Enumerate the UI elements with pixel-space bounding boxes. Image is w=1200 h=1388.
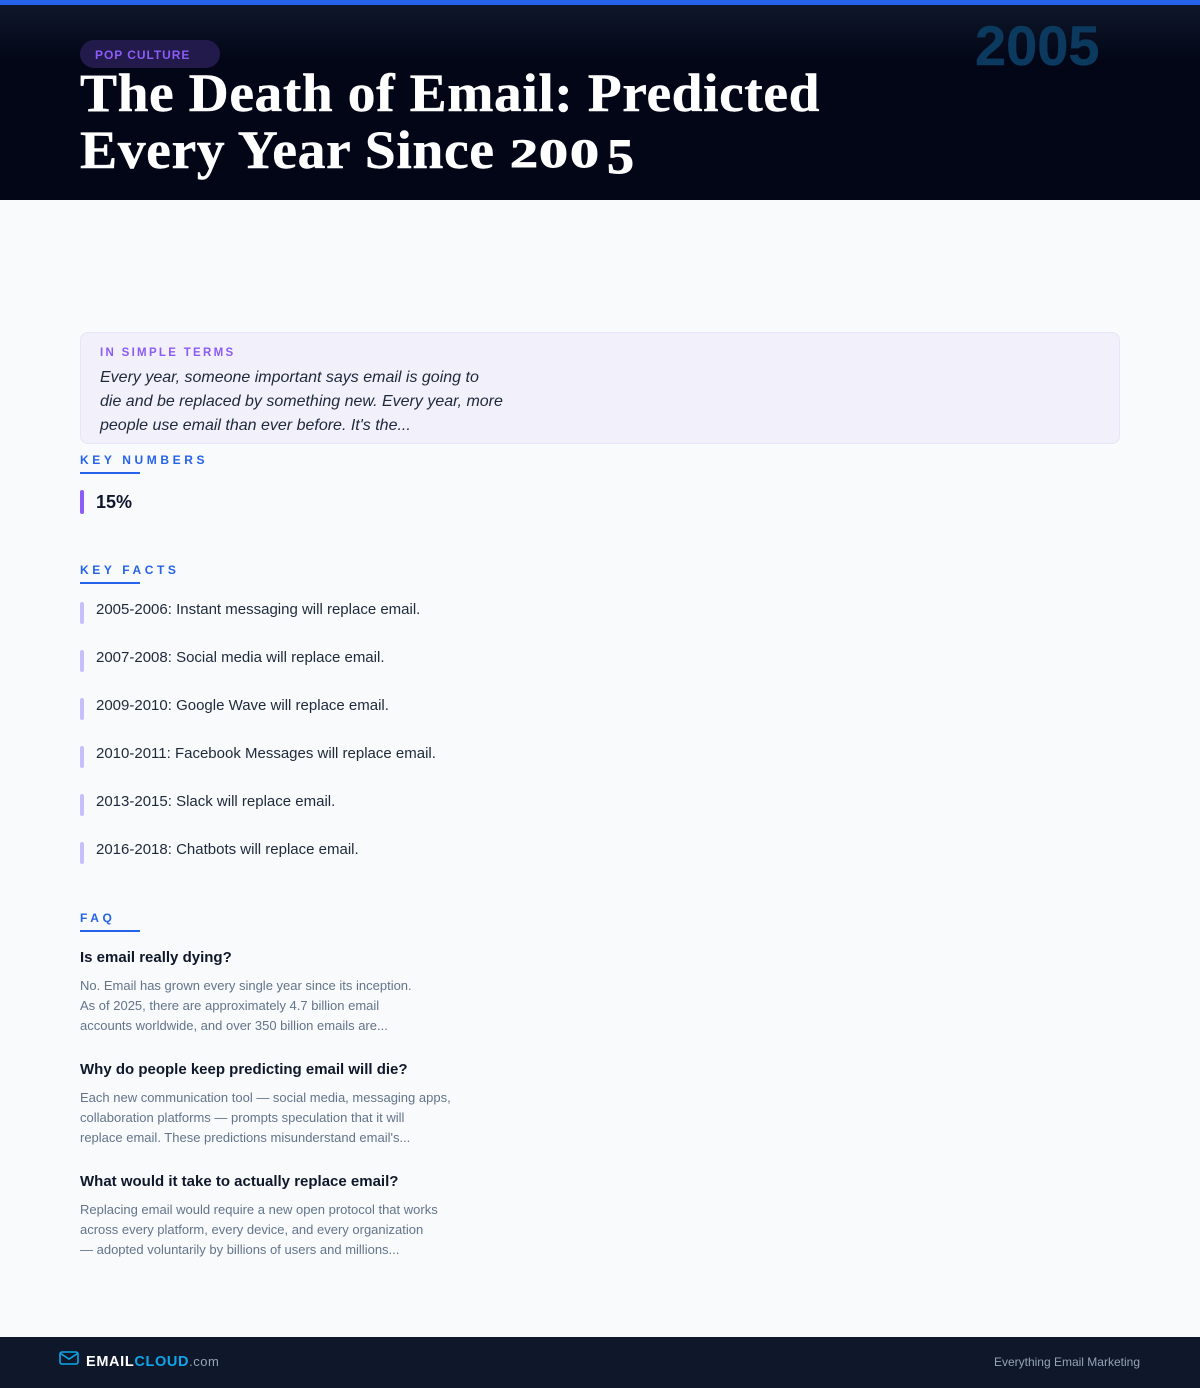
fact 5 — [80, 793, 335, 816]
heading: key numbers: KEY NUMBERS — [80, 453, 208, 467]
category badge: POP CULTURE — [95, 48, 190, 62]
title: 0 — [539, 130, 568, 176]
title: 2 — [510, 130, 538, 176]
watermark year: 2005 — [975, 14, 1100, 77]
FAQ question 3: What would it take to actually replace email? — [80, 1173, 398, 1190]
title: 5 — [607, 128, 634, 184]
fact 6 — [80, 841, 359, 864]
FAQ answer 1: No. Email has grown every single year since its inception. — [80, 978, 412, 993]
FAQ answer 3: — adopted voluntarily by billions of users and millions... — [80, 1242, 399, 1257]
panel label: IN SIMPLE TERMS — [100, 347, 235, 359]
FAQ answer 3 — [80, 1202, 438, 1257]
heading: key facts: KEY FACTS — [80, 563, 180, 577]
heading: FAQ: FAQ — [80, 911, 115, 925]
fact 1: 2005-2006: Instant messaging will replace email. — [96, 601, 420, 618]
FAQ answer 2: collaboration platforms — prompts speculation that it will — [80, 1110, 404, 1125]
stat: 15% — [80, 490, 132, 514]
category badge — [80, 40, 220, 68]
stat: 15%: 15% — [96, 492, 132, 512]
footer — [0, 1337, 1200, 1388]
icon: envelope — [59, 1351, 79, 1365]
panel: in simple terms — [80, 332, 1120, 444]
FAQ answer 3: across every platform, every device, and every organization — [80, 1222, 423, 1237]
title — [80, 63, 820, 184]
fact 3: 2009-2010: Google Wave will replace email. — [96, 697, 389, 714]
title: Every Year Since — [80, 120, 495, 180]
FAQ question 2: Why do people keep predicting email will die? — [80, 1061, 408, 1078]
brand wordmark: EMAILCLOUD.com — [86, 1354, 219, 1370]
panel text — [100, 369, 503, 434]
FAQ answer 2: replace email. These predictions misunderstand email's... — [80, 1130, 410, 1145]
FAQ answer 1: As of 2025, there are approximately 4.7 billion email — [80, 998, 379, 1013]
FAQ answer 3: Replacing email would require a new open protocol that works — [80, 1202, 438, 1217]
FAQ answer 2: Each new communication tool — social media, messaging apps, — [80, 1090, 451, 1105]
panel text: Every year, someone important says email is going to — [100, 369, 479, 386]
header banner — [0, 0, 1200, 200]
fact 5: 2013-2015: Slack will replace email. — [96, 793, 335, 810]
panel text: die and be replaced by something new. Every year, more — [100, 393, 503, 410]
FAQ question 1: Is email really dying? — [80, 949, 232, 966]
fact 6: 2016-2018: Chatbots will replace email. — [96, 841, 359, 858]
top accent bar — [0, 0, 1200, 5]
title: 0 — [570, 130, 599, 176]
FAQ answer 1: accounts worldwide, and over 350 billion emails are... — [80, 1018, 388, 1033]
title: The Death of Email: Predicted — [80, 63, 820, 123]
FAQ answer 2 — [80, 1090, 451, 1145]
tagline: Everything Email Marketing — [994, 1355, 1140, 1369]
panel text: people use email than ever before. It's the... — [100, 417, 411, 434]
FAQ answer 1 — [80, 978, 412, 1033]
fact 2: 2007-2008: Social media will replace email. — [96, 649, 384, 666]
fact 4: 2010-2011: Facebook Messages will replace email. — [96, 745, 436, 762]
